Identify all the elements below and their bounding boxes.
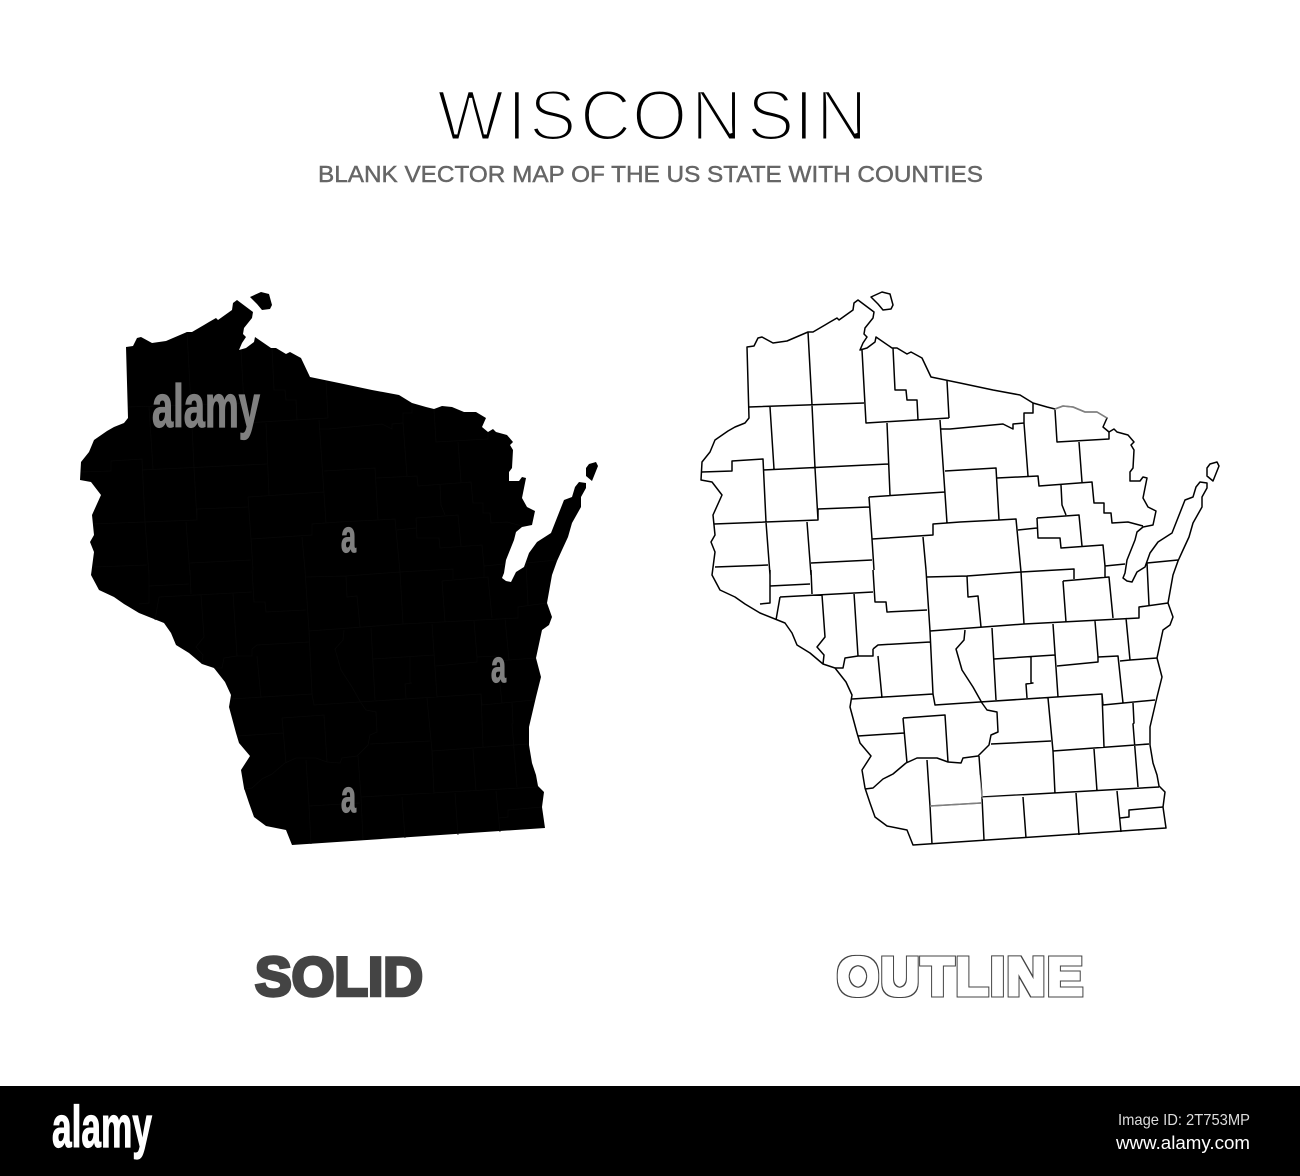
panel: outline map (701, 292, 1219, 845)
panel: solid map (80, 292, 598, 845)
website: www.alamy.com (1115, 1133, 1250, 1153)
subtitle: BLANK VECTOR MAP OF THE US STATE WITH COUNTIES (318, 161, 983, 187)
watermark on solid map: alamy (152, 373, 260, 440)
footer logo: alamy (52, 1095, 152, 1160)
watermark on solid map: a (341, 771, 357, 822)
title: WISCONSIN (437, 77, 867, 156)
label: solid: SOLID (255, 946, 423, 1008)
label: outline: OUTLINE (837, 947, 1083, 1007)
image id: Image ID: 2T753MP (1118, 1112, 1250, 1129)
watermark on solid map (152, 373, 507, 822)
watermark on solid map: a (341, 511, 357, 562)
footer bar (0, 1086, 1300, 1176)
watermark on solid map: a (491, 641, 507, 692)
